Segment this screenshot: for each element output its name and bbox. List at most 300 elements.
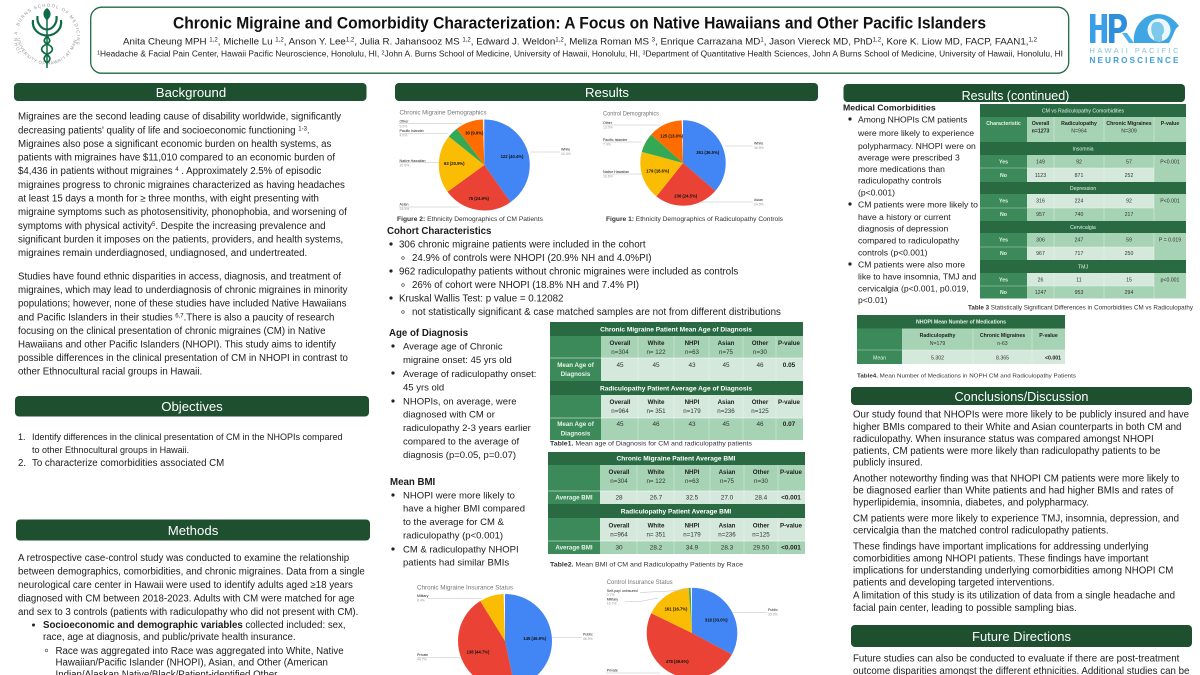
- pie chart: control insurance status: Self-pay/ uninsured: [607, 589, 638, 593]
- text: background paragraph 1: [18, 112, 347, 259]
- table 2: average BMI: <0.001: [781, 494, 801, 502]
- pie chart: control demographics: 36.5%: [754, 146, 764, 150]
- authors: , Julia R. Jahansooz MS: [354, 36, 462, 48]
- table 1: age of diagnosis: Other: [752, 399, 769, 406]
- panel: background: [14, 83, 366, 378]
- table 1: age of diagnosis: Radiculopathy Patient Average Age of Diagnosis: [600, 386, 752, 392]
- text: mean BMI: radiculopathy (p<0.001): [403, 530, 503, 542]
- text: conclusions body: implications for understanding underlying comorbidities among NHOPI CM: [853, 566, 1173, 576]
- text: age of diagnosis: [389, 328, 536, 461]
- table 1: age of diagnosis: 45: [722, 421, 730, 428]
- text: medical comorbidities: were more likely to experience: [857, 128, 974, 138]
- table 2: average BMI: Overall: [609, 522, 630, 530]
- pie chart: chronic migraine demographics: 122 (40.4%): [501, 154, 524, 159]
- caption: figure 2: Figure 2: Ethnicity Demographics of CM Patients: [397, 216, 543, 223]
- table 1: age of diagnosis: Mean Age of: [557, 421, 595, 428]
- pie chart: control insurance status: 33.0%: [768, 612, 778, 616]
- text: background paragraph 1: migraine symptoms such as photosensitivity, phonophobia, and worsening of: [18, 207, 347, 218]
- text: age of diagnosis: diagnosed with CM or: [403, 410, 495, 420]
- text: medical comorbidities: average were prescribed 3: [858, 152, 960, 162]
- table 1: age of diagnosis: NHPI: [685, 340, 700, 347]
- table 2: average BMI: Other: [753, 469, 770, 476]
- table 3: CM vs radiculopathy comorbidities: 57: [1126, 160, 1132, 166]
- text: background paragraph 1: significant burden it imposes on the patients, providers, and health systems,: [18, 234, 343, 246]
- text: conclusions body: A limitation of this study is its utilization of data from a single headache and: [853, 590, 1175, 602]
- table 4: NHOPI mean number of medications: <0.001: [1045, 356, 1061, 362]
- authors: , Edward J. Weldon: [471, 36, 555, 48]
- text: medical comorbidities: radiculopathy controls: [858, 176, 942, 186]
- table 3: CM vs radiculopathy comorbidities: 217: [1125, 212, 1133, 218]
- pie chart: chronic migraine demographics: Asian: [400, 202, 408, 206]
- text: background paragraph 2: migraines, which may lead to underdiagnosis of chronic migraines in minority: [18, 285, 348, 296]
- text: conclusions body: patients and developing targeted interventions.: [853, 578, 1055, 588]
- text: background paragraph 1: .: [307, 126, 310, 136]
- logo: Hawaii Pacific Neuroscience: [1090, 14, 1179, 65]
- pie chart: chronic migraine insurance status: Chronic Migraine Insurance Status: [417, 586, 513, 592]
- text: background paragraph 2: focusing on the clinical presentation of chronic migraines (CM) in Native: [18, 326, 325, 337]
- pie chart: chronic migraine demographics: Pacific Islander: [400, 129, 425, 133]
- pie chart: control insurance status: Private: [607, 668, 618, 672]
- table 2: average BMI: [548, 452, 805, 554]
- text: methods paragraph: [18, 553, 365, 618]
- text: age of diagnosis: diagnosis (p=0.05, p=0.07): [403, 450, 516, 461]
- text: medical comorbidities: p<0.01): [858, 295, 888, 305]
- text: background paragraph 1: 5: [152, 222, 156, 228]
- pie chart: chronic migraine insurance status: 8.4%: [417, 598, 425, 602]
- table 1: age of diagnosis: 43: [688, 362, 696, 369]
- text: mean BMI: patients had similar BMIs: [403, 558, 509, 568]
- authors: 1,2: [209, 38, 218, 44]
- table 2: average BMI: White: [648, 469, 665, 476]
- table 1: age of diagnosis: White: [648, 340, 665, 347]
- text: cohort characteristics: [387, 226, 781, 318]
- text: methods variables list: Socioeconomic and demographic variables collected included: sex,: [43, 620, 346, 631]
- pie chart: chronic migraine demographics: 9.9%: [400, 124, 407, 128]
- heading: methods: [16, 520, 370, 540]
- pie chart: chronic migraine demographics: 63 (20.9%): [444, 161, 465, 166]
- table 3: CM vs radiculopathy comorbidities: P-value: [1161, 121, 1179, 127]
- table 3: CM vs radiculopathy comorbidities: p<0.001: [1161, 278, 1180, 284]
- text: medical comorbidities: Medical Comorbidities: [843, 102, 936, 112]
- heading: methods: Methods: [168, 523, 219, 538]
- text: objectives list: [18, 432, 342, 469]
- heading: results: [395, 83, 818, 101]
- table 1: age of diagnosis: 45: [652, 362, 660, 369]
- table 1: age of diagnosis: n=179: [683, 408, 701, 415]
- text: background paragraph 1: decreasing patients' quality of life and socioeconomic functioning: [18, 126, 296, 136]
- text: cohort characteristics: 306 chronic migraine patients were included in the cohort: [399, 240, 646, 250]
- pie chart: chronic migraine demographics: [399, 110, 571, 211]
- table 3: CM vs radiculopathy comorbidities: 740: [1075, 212, 1083, 218]
- panel: conclusions: [851, 387, 1192, 614]
- text: background paragraph 2: [18, 272, 348, 378]
- text: age of diagnosis: compared to the average of: [403, 436, 520, 448]
- table 3: CM vs radiculopathy comorbidities: 957: [1036, 212, 1045, 218]
- text: background paragraph 2: possible differences in the clinical presentation of CM in NHOPI in contrast to: [18, 353, 348, 364]
- pie chart: chronic migraine demographics: 4.0%: [400, 134, 407, 138]
- table 3: CM vs radiculopathy comorbidities: 871: [1075, 173, 1083, 179]
- text: cohort characteristics: not statistically significant & case matched samples are not from different distributions: [412, 307, 781, 318]
- panel: methods: [16, 520, 370, 675]
- table 2: average BMI: n= 351: [646, 532, 666, 538]
- table 4: NHOPI mean number of medications: Radiculopathy: [920, 333, 955, 339]
- pie chart: chronic migraine insurance status: 145 (46.9%): [523, 636, 547, 641]
- pie chart: control demographics: Control Demographics: [603, 112, 659, 118]
- panel: results continued: [843, 84, 1194, 380]
- table 3: CM vs radiculopathy comorbidities: 294: [1125, 290, 1133, 296]
- authors: 3: [652, 38, 656, 44]
- text: methods variables list: Race was aggregated into Race was aggregated into White, Native: [56, 646, 344, 657]
- table 3: CM vs radiculopathy comorbidities: N=309: [1121, 128, 1137, 134]
- table 4: NHOPI mean number of medications: NHOPI Mean Number of Medications: [916, 320, 1006, 326]
- authors: 1,2: [1029, 38, 1038, 44]
- pie chart: chronic migraine demographics: 24.9%: [400, 207, 409, 211]
- table 2: average BMI: Average BMI: [555, 494, 593, 502]
- text: conclusions body: facial pain center, leading to possible sampling bias.: [853, 603, 1077, 614]
- pie chart: control insurance status: 0.7%: [607, 593, 614, 597]
- table 3: CM vs radiculopathy comorbidities: 306: [1036, 238, 1045, 244]
- table 1: age of diagnosis: 0.07: [783, 421, 796, 428]
- pie chart: chronic migraine insurance status: Private: [417, 653, 428, 657]
- table 3: CM vs radiculopathy comorbidities: Insomnia: [1072, 146, 1094, 152]
- logo: university seal: JOHN A. BURNS SCHOOL OF MEDICINE: [14, 4, 80, 54]
- table 2: average BMI: NHPI: [685, 469, 700, 476]
- text: medical comorbidities: controls (p<0.001): [858, 248, 928, 258]
- authors: Anita Cheung MPH: [123, 36, 205, 48]
- affiliations: John A. Burns School of Medicine, University of Hawaii, Honolulu, HI,: [385, 50, 642, 58]
- pie chart: chronic migraine demographics: 40.4%: [561, 152, 571, 156]
- text: background paragraph 1: migraines remain underdiagnosed, undiagnosed, and undertreated.: [18, 248, 307, 259]
- text: medical comorbidities: have a history or current: [858, 212, 951, 222]
- authors: , Anson Y. Lee: [284, 36, 346, 48]
- table 3: CM vs radiculopathy comorbidities: No: [1000, 290, 1007, 296]
- table 1: age of diagnosis: [550, 322, 803, 440]
- authors: , Meliza Roman MS: [564, 36, 652, 48]
- heading: objectives: [15, 396, 369, 416]
- text: conclusions body: [853, 410, 1189, 614]
- table 1: age of diagnosis: n=75: [719, 349, 734, 356]
- pie chart: chronic migraine insurance status: 138 (44.7%): [467, 650, 490, 654]
- text: medical comorbidities: (p<0.001): [858, 188, 895, 198]
- panel: future directions: [851, 625, 1192, 675]
- table 1: age of diagnosis: n=30: [753, 349, 768, 356]
- caption: table 4: Table4. Mean Number of Medications in NOPH CM and Radiculopathy Patients: [857, 374, 1076, 380]
- table 1: age of diagnosis: n=304: [611, 349, 629, 356]
- text: medical comorbidities: cervicalgia (p<0.001, p0.019,: [858, 284, 969, 294]
- table 3: CM vs radiculopathy comorbidities: No: [1000, 173, 1007, 179]
- table 2: average BMI: Asian: [719, 469, 736, 476]
- table 3: CM vs radiculopathy comorbidities: 92: [1076, 160, 1082, 166]
- pie chart: chronic migraine demographics: 75 (24.9%): [468, 196, 490, 201]
- table 3: CM vs radiculopathy comorbidities: 59: [1126, 238, 1132, 244]
- table 3: CM vs radiculopathy comorbidities: 224: [1075, 198, 1083, 204]
- text: background paragraph 2: other Ethnocultural racial groups in Hawaii.: [18, 366, 202, 378]
- pie chart: chronic migraine demographics: 30 (9.9%): [465, 130, 484, 136]
- table 3: CM vs radiculopathy comorbidities: 247: [1075, 238, 1083, 244]
- table 4: NHOPI mean number of medications: 8.365: [996, 356, 1009, 362]
- pie chart: chronic migraine demographics: 20.9%: [400, 164, 409, 168]
- pie chart: control demographics: 179 (18.6%): [646, 168, 670, 174]
- table 2: average BMI: P-value: [780, 522, 803, 530]
- affiliations: Headache & Facial Pain Center, Hawaii Pacific Neuroscience, Honolulu, HI,: [100, 50, 382, 58]
- pie chart: control demographics: 24.5%: [754, 202, 764, 206]
- table 3: CM vs radiculopathy comorbidities: 967: [1036, 251, 1045, 257]
- text: methods variables list: Hawaiian/Pacific Islander (NHOPI), Asian, and Other (American: [56, 658, 328, 668]
- table 1: age of diagnosis: 46: [756, 362, 764, 369]
- pie chart: chronic migraine insurance status: [417, 586, 593, 664]
- table 2: average BMI: 34.9: [686, 544, 699, 552]
- table 4: NHOPI mean number of medications: P-value: [1039, 333, 1058, 339]
- text: conclusions body: be diagnosed earlier than White patients and had higher BMIs and rates of: [853, 486, 1174, 496]
- panel: results: [387, 83, 818, 673]
- pie chart: control insurance status: Public: [768, 608, 778, 612]
- pie chart: control demographics: 7.4%: [603, 142, 611, 146]
- panel: objectives: [15, 396, 369, 469]
- pie chart: chronic migraine insurance status: Military: [417, 594, 429, 598]
- text: methods paragraph: between demographics, comorbidities, and chronic migraines. Data from a single: [18, 566, 365, 578]
- heading: future directions: [851, 625, 1192, 647]
- table 2: average BMI: 30: [615, 544, 623, 552]
- text: medical comorbidities: CM patients were more likely to: [858, 200, 978, 210]
- table 3: CM vs radiculopathy comorbidities: 252: [1125, 173, 1133, 179]
- table 3: CM vs radiculopathy comorbidities: Radiculopathy: [1061, 121, 1097, 127]
- heading: conclusions: Conclusions/Discussion: [955, 390, 1088, 404]
- logo: Hawaii Pacific Neuroscience: NEUROSCIENCE: [1090, 56, 1179, 65]
- text: background paragraph 1: 4: [175, 167, 179, 173]
- text: conclusions body: Our study found that NHOPIs were more likely to be publicly insured and have: [853, 410, 1189, 420]
- text: conclusions body: comorbidities among NHOPI patients. These findings have important: [853, 554, 1149, 564]
- pie chart: control demographics: Native Hawaiian: [603, 170, 629, 174]
- text: mean BMI: to the average for CM &: [403, 517, 505, 528]
- table 1: age of diagnosis: n=964: [611, 408, 629, 415]
- text: methods variables list: [32, 620, 346, 675]
- text: mean BMI: have a higher BMI compared: [403, 504, 525, 514]
- table 2: average BMI: n=125: [752, 532, 770, 538]
- table 3: CM vs radiculopathy comorbidities: 250: [1125, 251, 1133, 257]
- text: objectives list: to other Ethnocultural groups in Hawaii.: [32, 445, 189, 455]
- table 2: average BMI: n=964: [610, 532, 628, 538]
- pie chart: control insurance status: 318 (33.0%): [705, 618, 728, 622]
- table 1: age of diagnosis: P-value: [778, 399, 801, 406]
- table 1: age of diagnosis: n=125: [751, 408, 769, 415]
- table 4: NHOPI mean number of medications: [857, 315, 1065, 364]
- pie chart: control insurance status: 161 (16.7%): [665, 606, 688, 612]
- table 2: average BMI: 28.3: [721, 544, 734, 552]
- table 1: age of diagnosis: 46: [652, 421, 660, 428]
- pie chart: chronic migraine insurance status: Public: [583, 632, 593, 636]
- table 3: CM vs radiculopathy comorbidities: P = 0.019: [1159, 238, 1181, 244]
- text: cohort characteristics: 24.9% of controls were NHOPI (20.9% NH and 4.0%PI): [412, 253, 652, 264]
- pie chart: control demographics: 125 (13.0%): [660, 134, 684, 138]
- text: conclusions body: cervicalgia than the matched control radiculopathy patients.: [853, 526, 1109, 536]
- heading: conclusions: [851, 387, 1192, 405]
- table 3: CM vs radiculopathy comorbidities: 149: [1036, 160, 1045, 166]
- text: cohort characteristics: 26% of cohort were NHOPI (18.8% NH and 7.4% PI): [412, 280, 639, 291]
- table 3: CM vs radiculopathy comorbidities: Yes: [999, 198, 1008, 204]
- table 2: average BMI: n=236: [718, 532, 736, 538]
- table 1: age of diagnosis: Overall: [610, 399, 631, 406]
- table 2: average BMI: Average BMI: [555, 544, 593, 552]
- table 2: average BMI: Chronic Migraine Patient Average BMI: [617, 456, 736, 462]
- authors: , Jason Viereck MD, PhD: [764, 36, 873, 48]
- text: age of diagnosis: 45 yrs old: [403, 382, 444, 394]
- table 1: age of diagnosis: P-value: [778, 340, 801, 347]
- text: future directions body: Future studies can also be conducted to evaluate if there are post-treatment: [853, 654, 1180, 664]
- text: methods variables list: race, age at diagnosis, and public/private health insurance.: [43, 632, 296, 643]
- table 2: average BMI: <0.001: [781, 544, 801, 552]
- text: background paragraph 1: . Approximately 2.5% of episodic: [179, 166, 321, 177]
- text: cohort characteristics: Kruskal Wallis Test: p value = 0.12082: [399, 294, 563, 304]
- table 3: CM vs radiculopathy comorbidities: [980, 104, 1186, 298]
- table 3: CM vs radiculopathy comorbidities: n=1273: [1032, 128, 1049, 134]
- text: mean BMI: Mean BMI: [390, 477, 436, 488]
- table 3: CM vs radiculopathy comorbidities: Cervicalgia: [1070, 225, 1096, 231]
- pie chart: control demographics: White: [754, 142, 763, 146]
- table 1: age of diagnosis: Other: [752, 340, 769, 347]
- table 3: CM vs radiculopathy comorbidities: Chronic Migraines: [1106, 121, 1152, 127]
- table 3: CM vs radiculopathy comorbidities: Overall: [1032, 121, 1050, 127]
- table 1: age of diagnosis: 0.05: [783, 362, 796, 369]
- table 1: age of diagnosis: Asian: [718, 399, 735, 406]
- heading: results continued: [844, 84, 1185, 103]
- text: conclusions body: patients, CM patients were more likely than radiculopathy patients to be: [853, 446, 1160, 457]
- text: future directions body: [853, 654, 1189, 675]
- table 2: average BMI: Other: [753, 522, 770, 530]
- caption: figure 1: Figure 1: Ethnicity Demographics of Radiculopathy Controls: [606, 216, 783, 223]
- table 3: CM vs radiculopathy comorbidities: No: [1000, 251, 1007, 257]
- authors: 1,2: [346, 38, 355, 44]
- table 2: average BMI: 32.5: [686, 494, 699, 502]
- pie chart: control demographics: Pacific Islander: [603, 138, 628, 142]
- caption: table 3: Table 3 Statistically Significant Differences in Comorbidities CM vs Radiculopathy: [968, 304, 1194, 312]
- table 2: average BMI: 29.50: [753, 544, 769, 552]
- table 3: CM vs radiculopathy comorbidities: P<0.001: [1160, 198, 1180, 204]
- affiliations: Department of Quantitative Health Sciences, John A Burns School of Medicine, University of Hawaii, Honolulu, HI: [645, 50, 1063, 58]
- text: age of diagnosis: Average age of Chronic: [403, 342, 503, 352]
- table 1: age of diagnosis: n=63: [685, 349, 700, 356]
- pie chart: control insurance status: [606, 580, 778, 673]
- text: conclusions body: radiculopathy. When insurance status was compared amongst NHOPI: [853, 434, 1154, 445]
- pie chart: control insurance status: 16.7%: [607, 602, 616, 606]
- authors: , Kore K. Liow MD, FACP, FAAN1,: [881, 36, 1029, 48]
- text: background paragraph 1: Migraines are the second leading cause of disability worldwide, significantly: [18, 112, 341, 122]
- table 2: average BMI: 26.7: [650, 494, 663, 502]
- text: methods paragraph: A retrospective case-control study was conducted to examine the relationship: [18, 553, 349, 564]
- text: background paragraph 1: Migraines also pose a significant economic burden on health systems, as: [18, 139, 332, 150]
- text: methods paragraph: diagnosed with CM between 2018-2023. Adults with CM were matched for age: [18, 594, 355, 604]
- table 2: average BMI: n= 122: [646, 478, 666, 485]
- table 3: CM vs radiculopathy comorbidities: Yes: [999, 160, 1008, 166]
- table 1: age of diagnosis: n= 122: [646, 349, 666, 356]
- table 1: age of diagnosis: Diagnosis: [561, 430, 591, 438]
- text: objectives list: Identify differences in the clinical presentation of CM in the NHOPIs compared: [32, 432, 342, 442]
- pie chart: control demographics: Other: [603, 121, 613, 125]
- table 2: average BMI: NHPI: [685, 522, 700, 530]
- text: conclusions body: higher BMIs compared to their White and Asian counterparts in both CM and: [853, 422, 1181, 433]
- table 1: age of diagnosis: 46: [756, 421, 764, 428]
- table 2: average BMI: 28.2: [650, 544, 663, 552]
- logo: Hawaii Pacific Neuroscience: HAWAII PACIFIC: [1090, 46, 1179, 55]
- text: age of diagnosis: Average of radiculopathy onset:: [403, 369, 536, 380]
- text: background paragraph 2: Studies have found ethnic disparities in access, diagnosis, and treatment of: [18, 272, 341, 282]
- table 1: age of diagnosis: 45: [616, 421, 624, 428]
- title block: [91, 7, 1069, 73]
- table 4: NHOPI mean number of medications: Mean: [873, 356, 886, 362]
- pie chart: chronic migraine demographics: White: [561, 148, 570, 152]
- text: medical comorbidities: [843, 102, 978, 305]
- text: background paragraph 2: .There is also a paucity of research: [184, 312, 334, 324]
- table 1: age of diagnosis: n= 351: [646, 408, 666, 415]
- text: conclusions body: CM patients were more likely to experience TMJ, insomnia, depression, and: [853, 514, 1179, 524]
- table 1: age of diagnosis: NHPI: [685, 399, 700, 406]
- text: medical comorbidities: more medications than: [858, 164, 945, 174]
- table 1: age of diagnosis: 45: [722, 362, 730, 369]
- pie chart: control insurance status: 478 (49.6%): [666, 659, 689, 664]
- table 1: age of diagnosis: Asian: [718, 340, 735, 347]
- text: medical comorbidities: compared to radiculopathy: [858, 236, 960, 246]
- table 3: CM vs radiculopathy comorbidities: 11: [1076, 278, 1082, 284]
- authors: 1,2: [275, 38, 284, 44]
- table 4: NHOPI mean number of medications: n-63: [997, 341, 1008, 347]
- heading: results: Results: [585, 85, 629, 100]
- table 3: CM vs radiculopathy comorbidities: P<0.001: [1160, 160, 1180, 166]
- table 2: average BMI: n=30: [754, 478, 769, 485]
- table 3: CM vs radiculopathy comorbidities: CM vs Radiculopathy Comorbidities: [1042, 108, 1124, 114]
- text: conclusions body: publicly insured.: [853, 458, 923, 468]
- pie chart: control demographics: Asian: [754, 198, 763, 202]
- pie chart: chronic migraine demographics: Native Hawaiian: [400, 159, 425, 163]
- table 3: CM vs radiculopathy comorbidities: 92: [1126, 198, 1132, 204]
- text: medical comorbidities: polypharmacy. NHOPI were on: [858, 141, 976, 151]
- pie chart: control demographics: 18.6%: [603, 174, 613, 178]
- pie chart: control demographics: 13.0%: [603, 126, 613, 130]
- text: age of diagnosis: radiculopathy 2-3 years earlier: [403, 423, 531, 434]
- affiliations: 2: [382, 50, 385, 56]
- authors: 1: [760, 38, 764, 44]
- text: background paragraph 1: symptoms with physical activity: [18, 221, 152, 232]
- text: background paragraph 2: and Pacific Islanders in their studies: [18, 312, 173, 324]
- text: objectives list: To characterize comorbidities associated CM: [32, 458, 224, 469]
- table 2: average BMI: 27.0: [721, 494, 734, 502]
- pie chart: chronic migraine demographics: Other: [400, 120, 409, 124]
- affiliations: 1: [97, 50, 100, 56]
- table 3: CM vs radiculopathy comorbidities: Characteristic: [986, 121, 1021, 127]
- pie chart: control demographics: [603, 112, 764, 206]
- title: Chronic Migraine and Comorbidity Characterization: A Focus on Native Hawaiians and Other Pacific Islanders: [173, 14, 986, 32]
- text: age of diagnosis: NHOPIs, on average, were: [403, 396, 517, 408]
- text: background paragraph 1: $4,436 in patients without migraines: [18, 166, 173, 177]
- table 2: average BMI: Asian: [719, 522, 736, 530]
- table 1: age of diagnosis: Mean Age of: [557, 362, 595, 369]
- table 3: CM vs radiculopathy comorbidities: 1247: [1035, 290, 1046, 296]
- table 3: CM vs radiculopathy comorbidities: Yes: [999, 238, 1008, 244]
- authors: , Enrique Carrazana MD: [655, 36, 760, 48]
- table 4: NHOPI mean number of medications: Chronic Migraines: [980, 333, 1025, 339]
- pie chart: chronic migraine insurance status: 44.7%: [417, 658, 427, 662]
- table 3: CM vs radiculopathy comorbidities: 717: [1075, 251, 1083, 257]
- table 3: CM vs radiculopathy comorbidities: 316: [1036, 198, 1045, 204]
- table 3: CM vs radiculopathy comorbidities: 15: [1126, 278, 1132, 284]
- pie chart: control demographics: 236 (24.5%): [674, 194, 698, 198]
- text: methods paragraph: and sex to 3 controls (patients with radiculopathy who did not present with CM).: [18, 607, 358, 618]
- authors: 1,2: [462, 38, 471, 44]
- table 2: average BMI: 28.4: [755, 494, 768, 502]
- heading: background: [14, 83, 366, 101]
- table 3: CM vs radiculopathy comorbidities: TMJ: [1078, 264, 1088, 270]
- authors: 1,2: [555, 38, 564, 44]
- heading: future directions: Future Directions: [972, 629, 1071, 644]
- table 4: NHOPI mean number of medications: N=179: [930, 341, 945, 347]
